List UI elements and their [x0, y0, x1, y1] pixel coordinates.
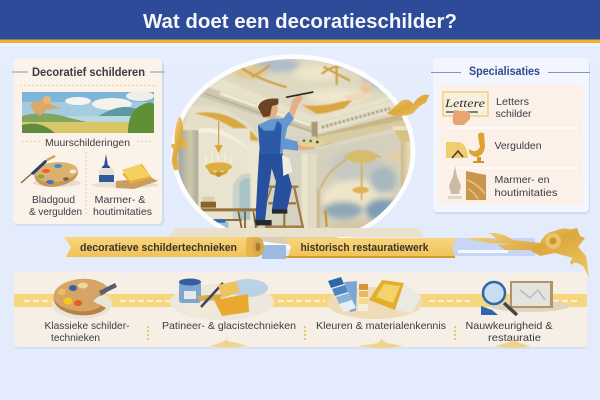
left vault [184, 106, 259, 143]
label: bladgoud en vergulden [29, 194, 82, 218]
label: marmer en houtimitaties [494, 175, 558, 199]
icon: colour swatches and gold tray [327, 277, 423, 319]
gold statuette [324, 210, 328, 227]
label: patineer en glacistechnieken: Patineer- & glacistechnieken [162, 320, 296, 332]
gold scroll right [387, 95, 429, 116]
gold flourish [465, 228, 589, 277]
title: Wat doet een decoratieschilder? [143, 11, 457, 33]
label: klassieke schildertechnieken: Klassieke schilder- [44, 320, 130, 332]
ribbon: historisch restauratiewerk [284, 238, 457, 258]
icon: classic palette [52, 279, 116, 319]
label: nauwkeurigheid en restauratie: restauratie [488, 332, 541, 344]
label: letters schilder [496, 97, 532, 120]
label: marmer en houtimitaties: houtimitaties [494, 188, 558, 199]
ribbon end scroll [246, 237, 264, 257]
label: klassieke schildertechnieken: technieken [51, 332, 100, 344]
centre wall [260, 137, 317, 230]
ribbon text: decoratieve schildertechnieken [80, 242, 237, 254]
label: kleuren en materialenkennis: Kleuren & materialenkennis [316, 320, 446, 332]
ceiling fresco [178, 59, 406, 228]
platform below illustration [168, 228, 424, 237]
central illustration: painter in historic interior [171, 54, 430, 249]
cornice mouldings [210, 80, 390, 123]
label: bladgoud en vergulden: Bladgoud [32, 194, 75, 206]
marble column [392, 126, 411, 189]
label: nauwkeurigheid en restauratie: Nauwkeurigheid & [466, 320, 552, 332]
panel: decoratief schilderen [12, 58, 165, 226]
label: marmer en houtimitaties: Marmer- en [494, 175, 550, 186]
label: muurschilderingen: Muurschilderingen [45, 137, 130, 149]
ribbon text: historisch restauratiewerk [300, 242, 429, 254]
label: nauwkeurigheid en restauratie [466, 320, 552, 344]
gold scroll left [171, 116, 188, 171]
ribbon: decoratieve schildertechnieken [64, 237, 264, 257]
mural painting [22, 91, 154, 133]
panel: vaardigheden strip [14, 272, 587, 349]
icon: patina tools and sponge [170, 278, 274, 320]
chandelier [205, 122, 232, 177]
label: marmer en houtimitaties: Marmer- & [94, 194, 146, 206]
label: klassieke schildertechnieken [44, 320, 130, 344]
work table [200, 197, 257, 229]
icon: gilded rooster [446, 132, 485, 163]
heading: decoratief schilderen: Decoratief schilderen [32, 65, 145, 79]
label: marmer en houtimitaties: houtimitaties [93, 206, 152, 218]
label: marmer en houtimitaties [93, 194, 152, 218]
floor [258, 237, 339, 244]
painter [255, 92, 324, 225]
icon: marble finial and wood panel [448, 166, 486, 200]
icon: magnifying glass and map [481, 281, 570, 315]
icon: palette [21, 156, 81, 187]
ladder [257, 186, 304, 234]
icon: glue bottle and gold leaf [91, 154, 159, 189]
label: letters schilder: Letters [496, 97, 529, 108]
ornaments along bottom edge [209, 338, 531, 348]
header banner [0, 0, 600, 46]
label: bladgoud en vergulden: & vergulden [29, 206, 82, 218]
heading: specialisaties: Specialisaties [469, 66, 540, 78]
label: vergulden: Vergulden [494, 141, 542, 152]
icon: letter painting: Lettere [444, 98, 485, 110]
blue band behind right ribbon [262, 238, 535, 259]
label: letters schilder: schilder [496, 109, 532, 120]
right wall mural [317, 132, 400, 233]
panel: specialisaties [431, 58, 590, 214]
icon: letter painting [443, 92, 488, 125]
label: muurschilderingen [22, 137, 154, 149]
